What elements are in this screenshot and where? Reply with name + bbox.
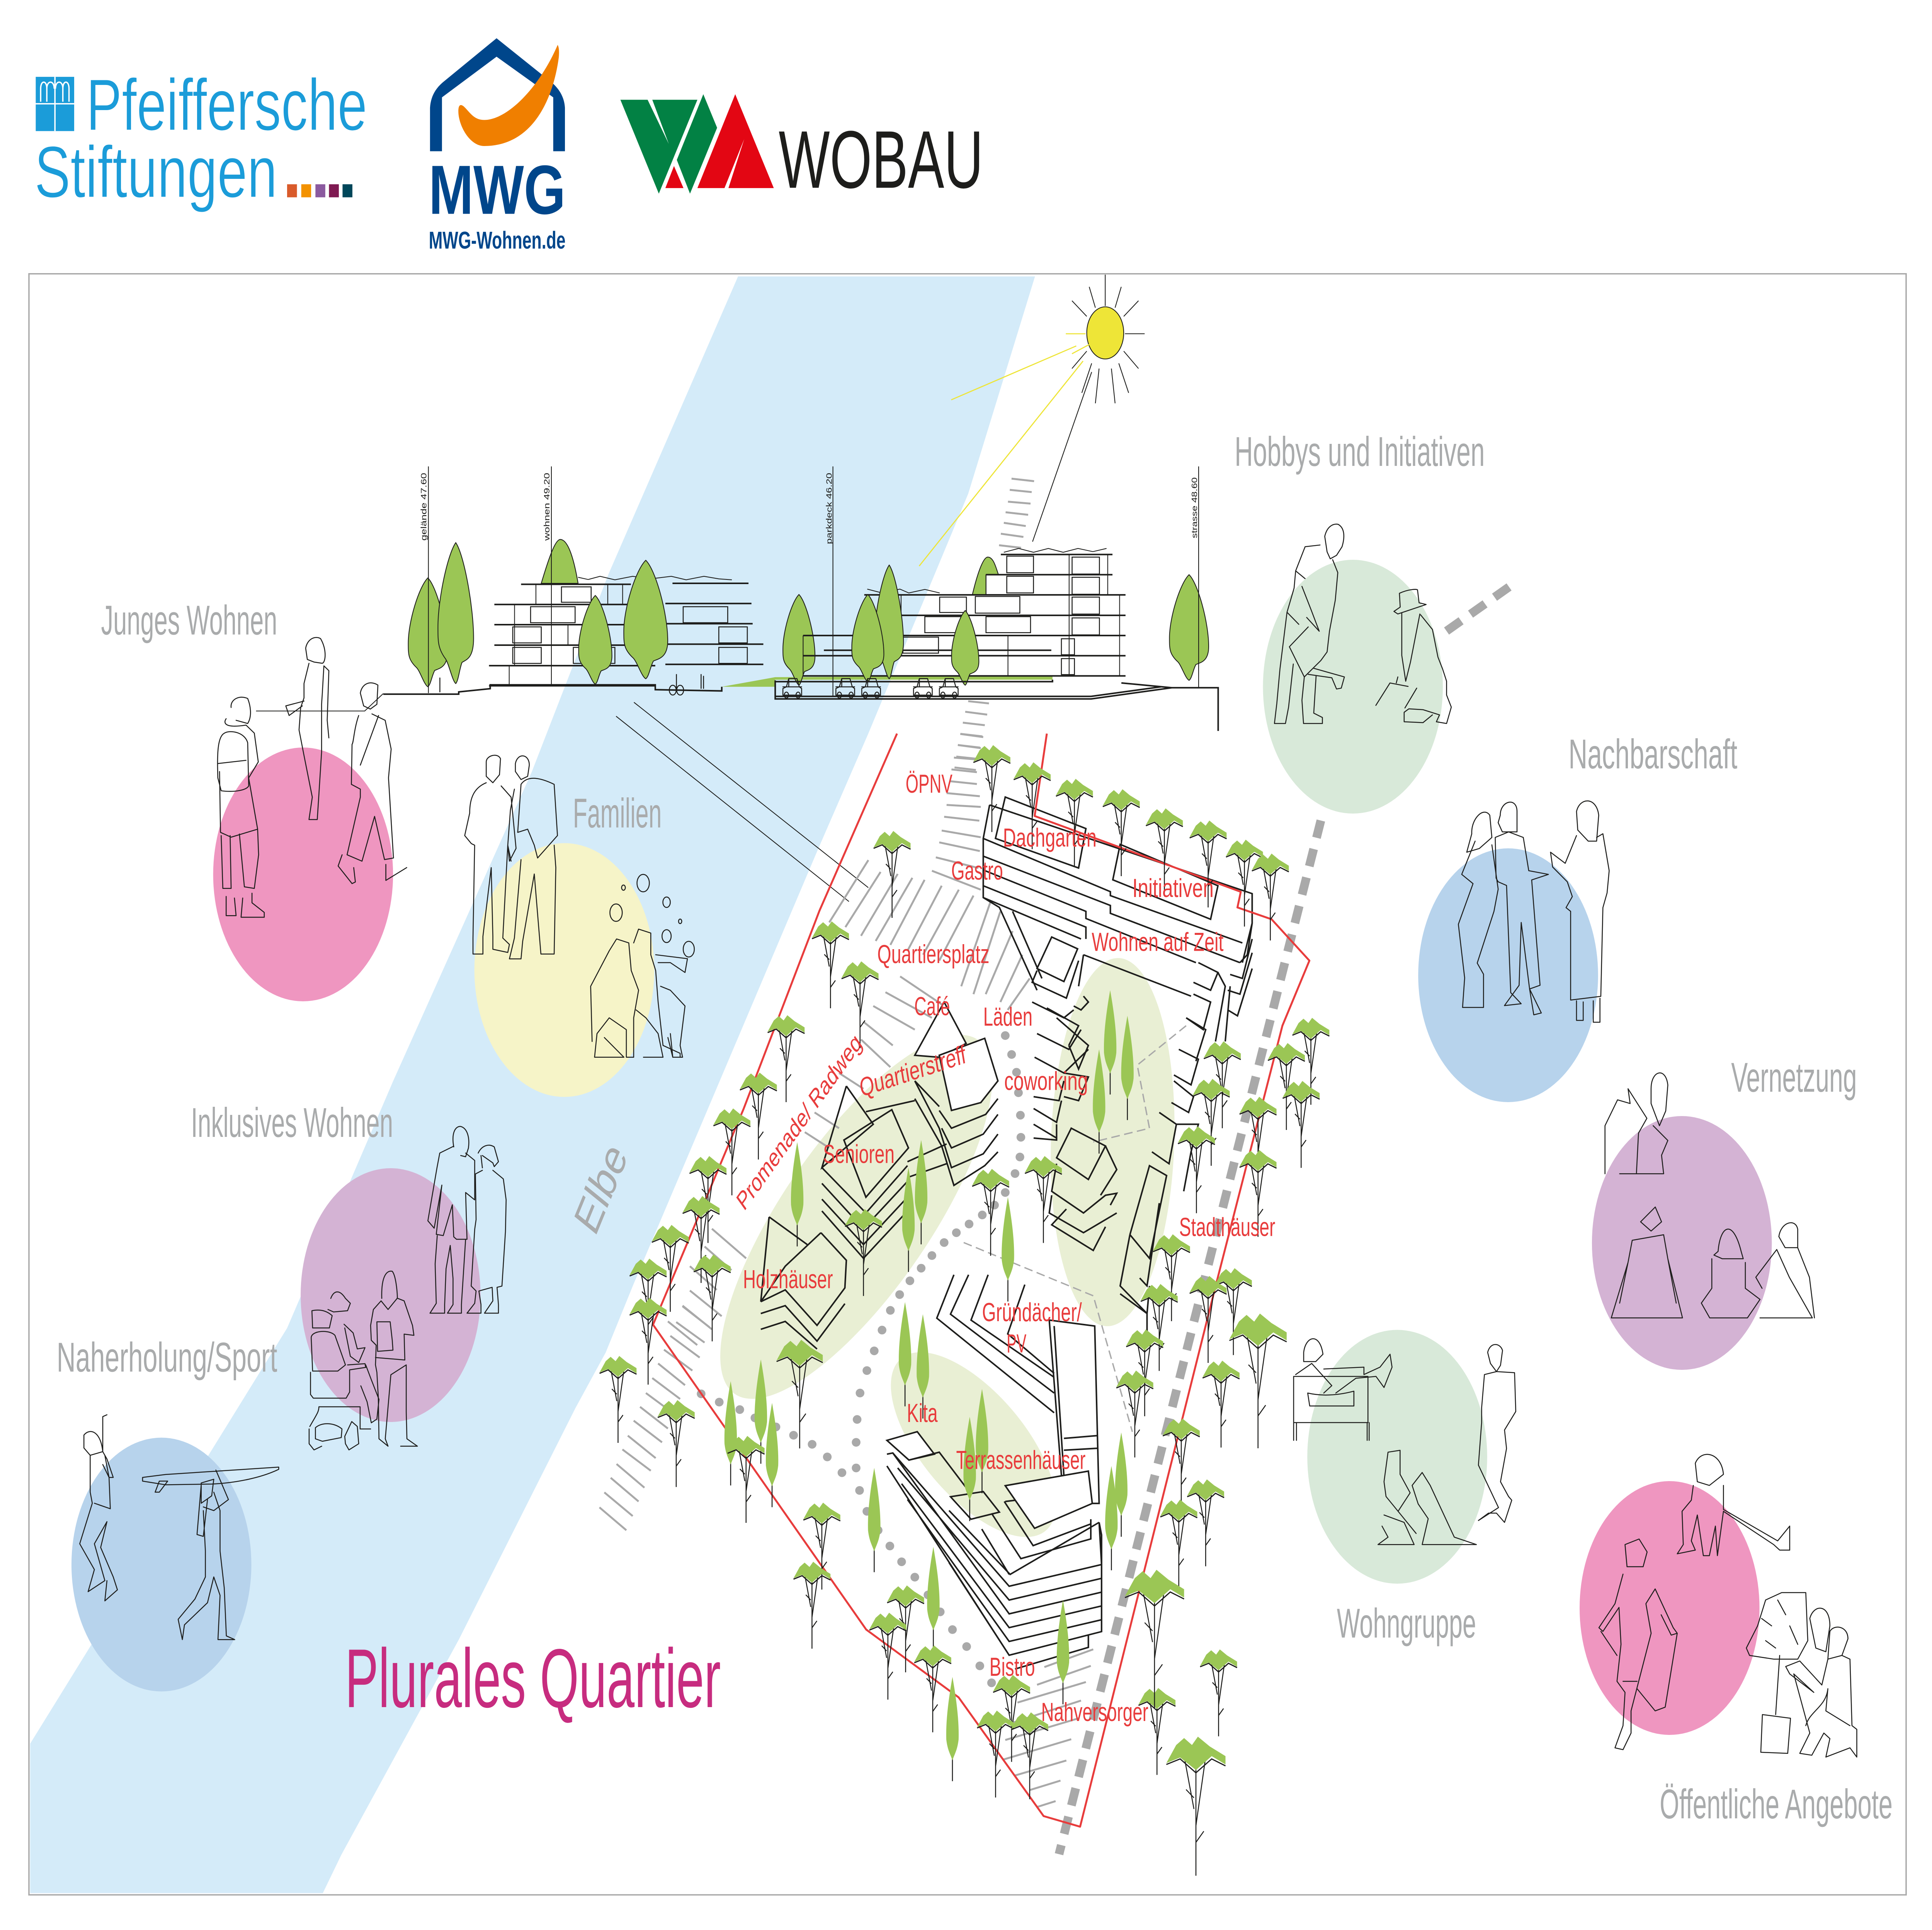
group: Junges Wohnen: Junges Wohnen bbox=[101, 596, 277, 644]
light green patches bbox=[684, 953, 1181, 1572]
red place labels: Café bbox=[914, 992, 950, 1021]
red place labels: Bistro bbox=[990, 1653, 1035, 1682]
red place labels: Kita bbox=[907, 1399, 938, 1428]
figures: three neighbours bbox=[1458, 801, 1609, 1022]
green mound bbox=[722, 676, 1053, 687]
red place labels: Stadthäuser bbox=[1179, 1213, 1275, 1242]
river Elbe bbox=[30, 277, 1035, 1893]
title: Plurales Quartier: Plurales Quartier bbox=[345, 1632, 721, 1725]
thin diagonal connector lines bbox=[616, 702, 868, 902]
red site boundary bbox=[653, 734, 1310, 1827]
red place labels: Initiativen bbox=[1132, 874, 1214, 903]
logo: Pfeiffersche Stiftungen: Stiftungen bbox=[34, 131, 277, 213]
section level lines and labels bbox=[256, 466, 1199, 711]
site plan bbox=[599, 734, 1329, 1876]
dashed main road bbox=[1059, 821, 1321, 1854]
section stripes bbox=[954, 479, 1034, 770]
logo: WOBAU: WOBAU bbox=[779, 114, 983, 205]
group: Öffentliche Angebote bbox=[1580, 1454, 1893, 1827]
umbrella trees bbox=[600, 745, 1329, 1876]
red place labels: Läden bbox=[983, 1002, 1032, 1031]
section trees in front bbox=[579, 560, 979, 685]
logo: MWG: MWG bbox=[429, 151, 566, 229]
figures: two surfers bbox=[80, 1415, 279, 1639]
red place labels: Wohnen auf Zeit bbox=[1092, 928, 1223, 957]
red place labels: Gastro bbox=[951, 856, 1003, 885]
figures: children with bubbles bbox=[591, 929, 687, 1057]
red place labels: ÖPNV bbox=[906, 770, 952, 799]
red place labels: Quartiersplatz bbox=[877, 940, 990, 969]
logo: WOBAU bbox=[621, 94, 983, 205]
section level lines and labels: parkdeck 46.20 bbox=[825, 473, 833, 544]
figures: woman with dog and seated people bbox=[1605, 1073, 1815, 1318]
logo: MWG bbox=[429, 38, 566, 254]
section level lines and labels: gelände 47.60 bbox=[419, 473, 428, 541]
red place labels: PV bbox=[1007, 1329, 1026, 1358]
red place labels: Senioren bbox=[823, 1140, 895, 1169]
section level lines and labels: wohnen 49.20 bbox=[543, 473, 551, 541]
buildings lower bbox=[887, 1275, 1102, 1669]
cyclist and pedestrians bbox=[440, 674, 704, 695]
figures: couple, wheelchair user and friend bbox=[309, 1126, 506, 1450]
section drawing bbox=[383, 479, 1218, 770]
group: Hobbys und Initiativen: Hobbys und Initiativen bbox=[1235, 428, 1485, 475]
group: Familien: Familien bbox=[573, 790, 662, 836]
group: Familien bbox=[465, 755, 694, 1097]
logo: Pfeiffersche Stiftungen: Pfeiffersche bbox=[86, 64, 367, 146]
group: Wohngruppe bbox=[1294, 1330, 1516, 1646]
buildings upper bbox=[761, 797, 1252, 1349]
group: Nachbarschaft bbox=[1418, 731, 1737, 1102]
red place labels: Terrassenhäuser bbox=[956, 1446, 1085, 1475]
figures: three young people bbox=[218, 637, 407, 917]
section level lines and labels: strasse 48.60 bbox=[1190, 477, 1199, 538]
sun with rays bbox=[919, 275, 1145, 566]
figures: stretching, rope skipping, planting a tree bbox=[1599, 1454, 1857, 1757]
dotted path bbox=[701, 1036, 1021, 1683]
red place labels: Dachgarten bbox=[1003, 824, 1097, 853]
group: Naherholung/Sport bbox=[57, 1334, 279, 1692]
cars in parking deck bbox=[783, 679, 958, 698]
group: Öffentliche Angebote: Öffentliche Angebote bbox=[1660, 1780, 1893, 1827]
buildings in section bbox=[489, 549, 1126, 686]
red place labels: Holzhäuser bbox=[743, 1265, 833, 1294]
dashed road upper right bbox=[1447, 583, 1515, 631]
red place labels: Gründächer/ bbox=[982, 1298, 1082, 1327]
thin dashed paths bbox=[964, 1026, 1186, 1432]
figures: reclining woman, man, girl with dog bbox=[1294, 1339, 1516, 1544]
logo: Pfeiffersche Stiftungen bbox=[34, 64, 367, 213]
group: Vernetzung: Vernetzung bbox=[1731, 1054, 1857, 1101]
logo: MWG: MWG-Wohnen.de bbox=[429, 227, 566, 254]
group: Junges Wohnen bbox=[101, 596, 407, 1001]
gray stripes: paved areas bbox=[599, 734, 1093, 1807]
red place labels: Quartierstreff bbox=[857, 1040, 968, 1103]
figures: parents bbox=[465, 755, 558, 959]
red place labels: Promenade/ Radweg bbox=[733, 1028, 866, 1216]
group: Hobbys und Initiativen bbox=[1235, 428, 1485, 814]
red place labels: coworking bbox=[1004, 1067, 1088, 1096]
ground and parking deck line bbox=[383, 680, 1218, 731]
group: Nachbarschaft: Nachbarschaft bbox=[1568, 731, 1737, 777]
section trees behind buildings bbox=[408, 539, 1209, 687]
group: Naherholung/Sport: Naherholung/Sport bbox=[57, 1334, 277, 1381]
red place labels bbox=[733, 770, 1275, 1727]
label: Elbe: Elbe bbox=[566, 1133, 635, 1243]
group: Inklusives Wohnen bbox=[191, 1099, 506, 1450]
group: Wohngruppe: Wohngruppe bbox=[1337, 1600, 1476, 1646]
cypress trees bbox=[724, 990, 1134, 1781]
figures: gardeners bbox=[1274, 524, 1451, 724]
group: Inklusives Wohnen: Inklusives Wohnen bbox=[191, 1099, 393, 1146]
group: Vernetzung bbox=[1592, 1054, 1857, 1370]
red place labels: Nahversorger bbox=[1041, 1698, 1148, 1727]
